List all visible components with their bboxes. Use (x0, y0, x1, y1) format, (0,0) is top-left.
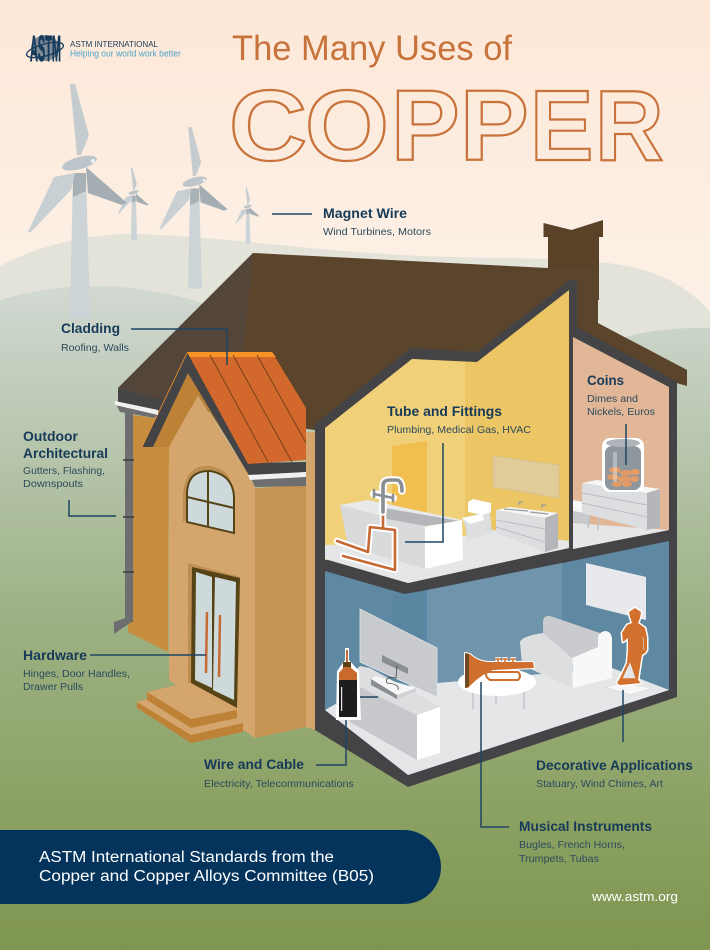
cable icon (336, 648, 361, 720)
label: outdoor architectural: Downspouts (23, 478, 83, 490)
footer banner: ASTM International Standards from the (39, 849, 334, 866)
chimney (544, 220, 603, 300)
main roof (118, 253, 687, 430)
cutaway outer wall (315, 280, 677, 787)
logo: ASTM (30, 28, 61, 69)
coins room (573, 337, 669, 549)
label: magnet wire: Wind Turbines, Motors (323, 226, 431, 238)
house (114, 220, 687, 787)
sofa (520, 616, 612, 688)
statue (617, 608, 647, 685)
label: cladding (61, 321, 227, 365)
front gable wall (169, 395, 255, 738)
trumpet (465, 653, 534, 688)
label: wire and cable: Electricity, Telecommunications (204, 778, 354, 790)
gable fascia (142, 353, 306, 477)
label: hardware: Drawer Pulls (23, 681, 83, 693)
faucet and pipe (337, 480, 402, 570)
label: wire and cable: Wire and Cable (204, 757, 304, 772)
gable gutter (248, 472, 306, 487)
title: copper (232, 88, 664, 162)
copper roof (187, 352, 306, 464)
coin jar (602, 438, 644, 492)
coins room floor (573, 523, 669, 549)
label: musical instruments: Musical Instruments (519, 819, 652, 834)
mirror (493, 456, 559, 498)
roof fascia (118, 388, 165, 412)
vanity (496, 502, 558, 552)
label: hardware (23, 648, 206, 693)
label: magnet wire (272, 206, 431, 238)
roof gutter (115, 401, 158, 418)
label: outdoor architectural (23, 429, 116, 516)
steps (137, 685, 243, 743)
label: decorative applications (536, 690, 693, 790)
yellow room (325, 290, 569, 583)
wall art (586, 563, 646, 620)
bathtub (340, 500, 463, 569)
yellow room floor (325, 530, 569, 583)
window (183, 466, 234, 533)
tan wall strip (306, 432, 315, 730)
tv (360, 609, 437, 697)
title line: The Many Uses of (232, 29, 512, 68)
background sky (0, 0, 710, 320)
label: tube and fittings: Plumbing, Medical Gas, HVAC (387, 424, 531, 436)
side wall of gable (255, 485, 306, 738)
toilet (462, 499, 492, 540)
label: outdoor architectural: Gutters, Flashing, (23, 465, 105, 477)
label: hardware: Hardware (23, 648, 88, 663)
logo: Helping our world work better (70, 48, 181, 58)
label: cladding: Cladding (61, 321, 120, 336)
label: magnet wire: Magnet Wire (323, 206, 408, 221)
label: wire and cable (204, 697, 378, 790)
back hill (0, 234, 710, 950)
label: decorative applications: Statuary, Wind Chimes, Art (536, 778, 663, 790)
gable shadow (153, 373, 248, 470)
label: musical instruments (481, 682, 652, 865)
logo: ASTM INTERNATIONAL (70, 39, 158, 49)
dresser (582, 480, 660, 530)
lighter roof slope (118, 253, 253, 400)
small table (573, 500, 600, 530)
label: coins: Coins (587, 373, 624, 388)
door in yellow room (392, 441, 427, 512)
front hills and green ground (0, 286, 710, 950)
blue room (325, 541, 669, 775)
label: outdoor architectural: Architectural (23, 446, 108, 461)
label: musical instruments: Trumpets, Tubas (519, 853, 599, 865)
left wall (128, 415, 170, 652)
tv stand (345, 665, 440, 760)
statue base (605, 683, 652, 695)
label: cladding: Roofing, Walls (61, 342, 129, 354)
label: outdoor architectural: Outdoor (23, 429, 79, 444)
footer banner: Copper and Copper Alloys Committee (B05) (39, 868, 374, 885)
blue room floor (325, 668, 669, 775)
small wind turbines (118, 127, 259, 289)
website: www.astm.org (591, 890, 678, 904)
label: hardware: Hinges, Door Handles, (23, 668, 130, 680)
label: musical instruments: Bugles, French Horns, (519, 839, 625, 851)
label: tube and fittings (387, 404, 531, 542)
logo (25, 28, 181, 69)
large wind turbine (28, 84, 127, 318)
label: coins: Nickels, Euros (587, 406, 655, 418)
label: coins (587, 373, 655, 465)
label: tube and fittings: Tube and Fittings (387, 404, 502, 419)
label: decorative applications: Decorative Applications (536, 758, 693, 773)
label: coins: Dimes and (587, 393, 638, 405)
footer banner (0, 830, 441, 904)
downpipe (114, 413, 134, 634)
table (458, 668, 536, 709)
door (188, 563, 240, 708)
